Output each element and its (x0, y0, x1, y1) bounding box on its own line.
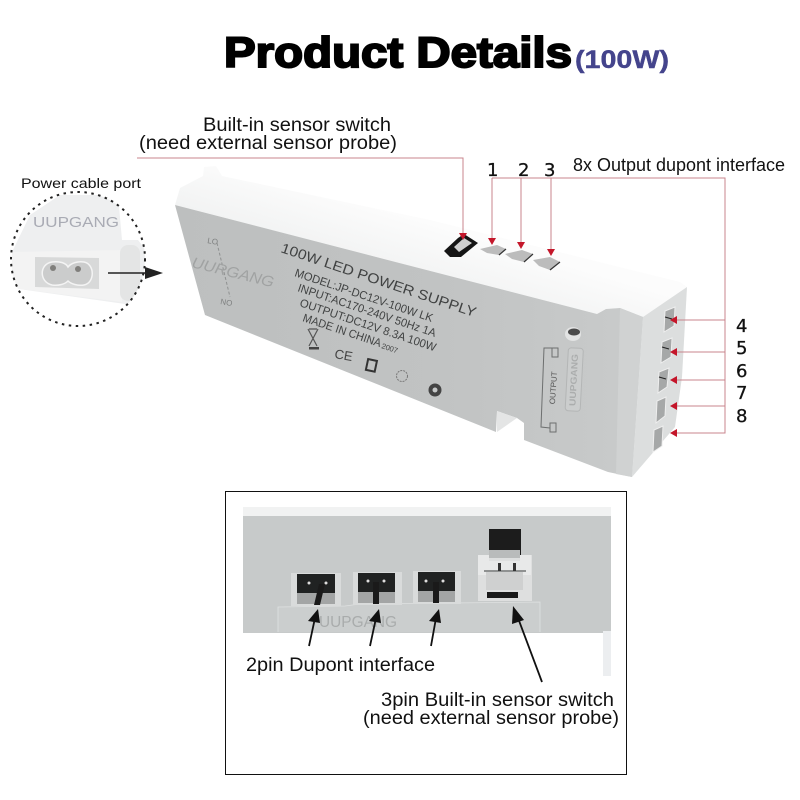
end face (632, 287, 687, 477)
panel: connector close-up (226, 492, 626, 774)
product label text: MADE IN CHINA (301, 312, 383, 350)
port numbers 4 to 8: 7 (736, 383, 747, 404)
embossed label (565, 348, 583, 411)
output diagram (541, 348, 559, 432)
product label text: 100W LED POWER SUPPLY (279, 240, 479, 320)
inset photo: UUPGANG (33, 214, 119, 231)
product label text: INPUT:AC170-240V 50Hz 1A (296, 282, 438, 340)
certification marks (308, 329, 442, 396)
title suffix: 100W: (100W) (575, 46, 669, 74)
product label text (279, 240, 479, 355)
screw slot (565, 327, 581, 341)
port numbers 4 to 8: 5 (736, 338, 747, 359)
leader line: sensor switch (137, 158, 463, 235)
port numbers 4 to 8 (736, 316, 747, 427)
callout: built-in sensor switch: (need external sensor probe) (139, 133, 397, 154)
port numbers 4 to 8: 8 (736, 406, 747, 427)
arrow to device (108, 267, 163, 279)
watermark: UUPGANG (319, 614, 397, 631)
connector: sensor switch (444, 234, 478, 257)
arrowhead: sensor switch (459, 233, 467, 240)
callout: 8x output: 8x Output dupont interface (573, 154, 785, 175)
2pin socket 2 (353, 572, 402, 605)
arrows to connectors (308, 606, 542, 682)
LN diagram (207, 236, 233, 308)
front face (175, 205, 643, 477)
port numbers 1 to 3: 1 (487, 160, 498, 181)
front bevel (616, 308, 643, 477)
label: 2pin dupont interface: 2pin Dupont interface (246, 655, 435, 676)
product label text: 2007 (380, 341, 399, 355)
LN diagram: LO (207, 236, 219, 247)
product label text: MODEL:JP-DC12V-100W LK (293, 267, 435, 325)
product label text: OUTPUT:DC12V 8.3A 100W (298, 297, 438, 354)
label: power cable port: Power cable port (21, 175, 141, 191)
top face (175, 166, 687, 317)
output diagram: OUTPUT (548, 371, 559, 405)
certification marks: CE (333, 346, 354, 364)
2pin socket 1 (291, 573, 341, 606)
notch (497, 411, 517, 432)
connector: outputs 1 to 3 (480, 245, 560, 270)
label: 3pin built-in sensor switch: (need external sensor probe) (363, 708, 619, 729)
port numbers 4 to 8: 4 (736, 316, 747, 337)
port numbers 4 to 8: 6 (736, 361, 747, 382)
title: Product Details (224, 30, 572, 77)
label: 3pin built-in sensor switch: 3pin Built-in sensor switch (381, 690, 614, 711)
close-up photo (243, 507, 611, 676)
3pin sensor socket (478, 529, 532, 601)
LN diagram: NO (220, 297, 233, 308)
label: 3pin built-in sensor switch (363, 690, 619, 729)
inset photo (12, 195, 145, 304)
port numbers 1 to 3: 2 (518, 160, 529, 181)
watermark: UURGANG (190, 254, 276, 291)
callout: built-in sensor switch (139, 115, 397, 154)
leader lines: output ports (492, 178, 725, 433)
port numbers 1 to 3: 3 (544, 160, 555, 181)
arrowheads: output ports (488, 238, 677, 437)
port numbers 1 to 3 (487, 160, 555, 181)
dotted circle (11, 192, 145, 326)
embossed label: UUPGANG (567, 354, 580, 406)
connectors: outputs 4 to 8 (653, 307, 675, 452)
2pin socket 3 (413, 571, 461, 604)
power supply device (175, 166, 687, 477)
panel: power cable port (10, 175, 163, 330)
callout: built-in sensor switch: Built-in sensor switch (203, 115, 391, 136)
